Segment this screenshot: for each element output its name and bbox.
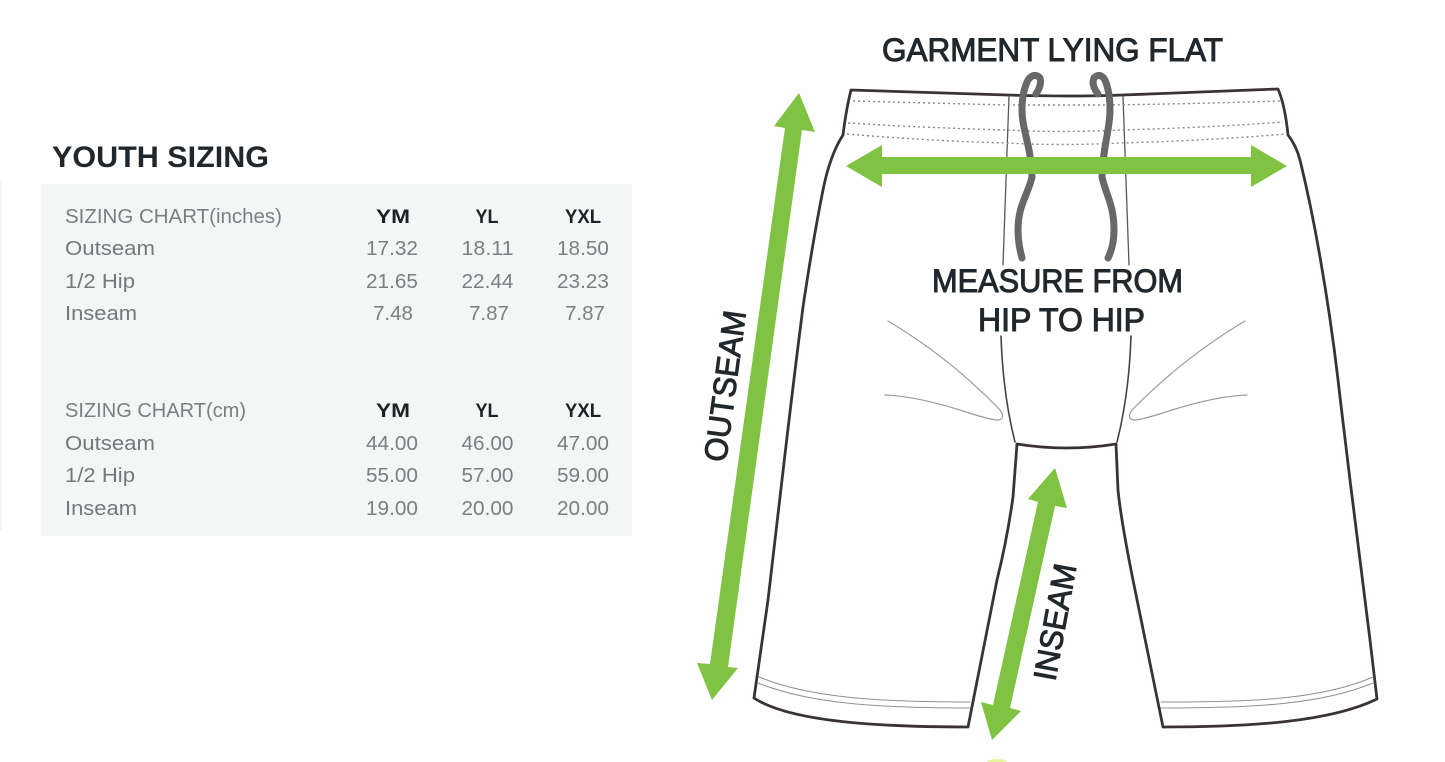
- thigh crease lines: [885, 321, 1247, 420]
- waistband stitching: [847, 101, 1287, 144]
- table: sizing chart in centimetres: 47.00: [557, 433, 609, 455]
- table: sizing chart in centimetres: YL: [476, 401, 499, 422]
- table: sizing chart in inches: 18.11: [462, 238, 514, 260]
- table: sizing chart in centimetres: Outseam: [65, 433, 155, 455]
- table: sizing chart in centimetres: 57.00: [462, 465, 514, 487]
- table: sizing chart in centimetres: 20.00: [557, 498, 609, 520]
- title: youth sizing: YOUTH SIZING: [52, 141, 269, 174]
- table: sizing chart in centimetres: Inseam: [65, 498, 137, 520]
- table: sizing chart in inches: YL: [476, 207, 499, 228]
- table: sizing chart in inches: YM: [376, 207, 410, 228]
- arrow: outseam: [697, 93, 815, 700]
- table: sizing chart in inches: 18.50: [557, 238, 609, 260]
- table: sizing chart in inches: 7.87: [469, 303, 509, 325]
- table: sizing chart in centimetres: YM: [376, 401, 410, 422]
- table: sizing chart in inches: 1/2 Hip: [65, 271, 135, 293]
- table: sizing chart in inches: 17.32: [366, 238, 418, 260]
- shorts silhouette: [754, 89, 1377, 727]
- table: sizing chart in inches: Inseam: [65, 303, 137, 325]
- table: sizing chart in inches: SIZING CHART(inches): [65, 206, 282, 228]
- table: sizing chart in centimetres: 59.00: [557, 465, 609, 487]
- table: sizing chart in inches: 23.23: [557, 271, 609, 293]
- table: sizing chart in centimetres: [65, 400, 609, 520]
- label: measure from hip to hip: MEASURE FROM: [932, 263, 1183, 299]
- hem stitching: [758, 677, 1373, 708]
- arrow: inseam: [981, 468, 1067, 740]
- label: inseam: INSEAM: [1027, 561, 1083, 683]
- table: sizing chart in centimetres: 20.00: [462, 498, 514, 520]
- table: sizing chart in inches: 7.48: [373, 303, 413, 325]
- table: sizing chart in centimetres: 44.00: [366, 433, 418, 455]
- table: sizing chart in centimetres: 46.00: [462, 433, 514, 455]
- table: sizing chart in centimetres: 19.00: [366, 498, 418, 520]
- table: sizing chart in inches: Outseam: [65, 238, 155, 260]
- arrow: hip to hip: [846, 145, 1287, 187]
- table: sizing chart in inches: [65, 206, 609, 325]
- table: sizing chart in centimetres: SIZING CHART(cm): [65, 400, 246, 422]
- table: sizing chart in centimetres: 1/2 Hip: [65, 465, 135, 487]
- label: measure from hip to hip: [932, 263, 1183, 338]
- table: sizing chart in inches: YXL: [565, 207, 601, 228]
- table: sizing chart in inches: 22.44: [462, 271, 514, 293]
- table: sizing chart in inches: 21.65: [366, 271, 418, 293]
- table: sizing chart in centimetres: YXL: [565, 401, 601, 422]
- illustration: shorts outline: [754, 75, 1377, 727]
- panel: sizing tables: [41, 184, 632, 536]
- front panel seams: [1001, 96, 1131, 442]
- drawstrings: [1018, 75, 1114, 258]
- table: sizing chart in centimetres: 55.00: [366, 465, 418, 487]
- heading: garment lying flat: GARMENT LYING FLAT: [882, 32, 1223, 68]
- label: outseam: OUTSEAM: [697, 308, 753, 464]
- table: sizing chart in inches: 7.87: [565, 303, 605, 325]
- label: measure from hip to hip: HIP TO HIP: [978, 302, 1145, 338]
